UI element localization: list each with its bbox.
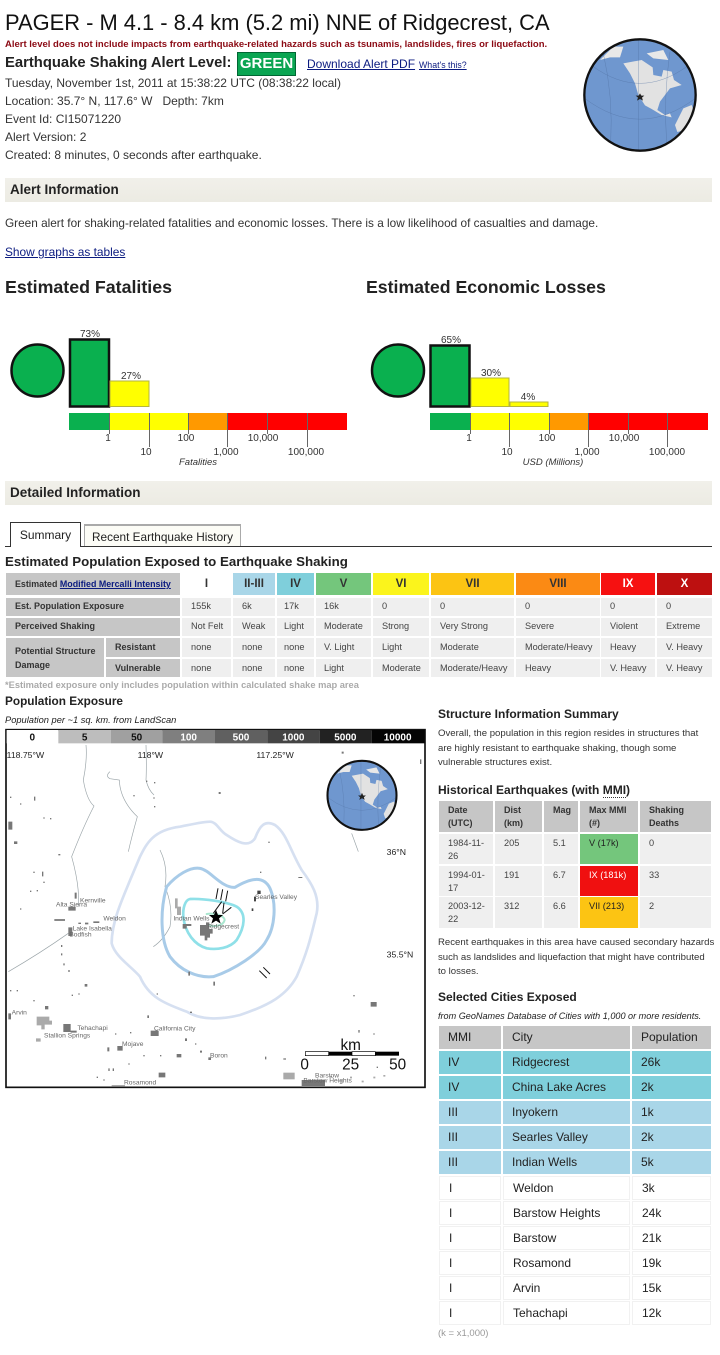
event details: Location: 35.7° N, 117.6° W Depth: 7km [5,94,224,108]
chart: fatalities [10,329,347,468]
table: shaking intensity: Moderate [440,642,479,652]
table: historical earthquakes: 17 [448,883,458,893]
table: shaking intensity [6,573,712,677]
table: shaking intensity: 0 [382,601,387,611]
map axis labels [7,750,413,960]
table: historical earthquakes: (km) [504,818,523,828]
table: shaking intensity: Not Felt [191,621,223,631]
table: selected cities: I [449,1306,452,1320]
table: shaking intensity: VII [465,578,480,590]
table: shaking intensity: IV [290,578,301,590]
table: shaking intensity: Heavy [610,642,636,652]
city labels: Weldon [103,916,126,923]
table: selected cities: MMI [448,1030,471,1044]
tab line [5,546,712,547]
legend: population scale: 500 [233,732,250,743]
shaking contours [112,822,317,1018]
chart: economic losses: 65% [441,335,461,346]
event details [5,76,341,162]
table: selected cities: City [512,1030,533,1044]
table: selected cities: Tehachapi [513,1306,568,1320]
chart: economic losses: 1,000 [574,447,600,458]
table: selected cities: Ridgecrest [512,1055,569,1069]
table: historical earthquakes: Deaths [649,818,679,828]
table: historical earthquakes: 26 [448,851,458,861]
scale bar: 50 [389,1056,406,1073]
secondary hazards text [438,937,714,977]
table: historical earthquakes: 205 [504,838,519,848]
table: historical earthquakes: Max MMI [589,805,627,815]
table: shaking intensity: Moderate/Heavy [525,642,592,652]
table: shaking intensity: Light [284,621,304,631]
legend: population scale: 5000 [334,732,357,743]
table: shaking intensity: 0 [666,601,671,611]
table: selected cities: Population [641,1030,698,1044]
map axis labels: 118.75°W [7,750,45,760]
table: shaking intensity: Extreme [666,621,700,631]
structure summary text: are highly resistant to earthquake shaking, though some [438,742,676,754]
table: shaking intensity: 0 [525,601,530,611]
population source note: Population per ~1 sq. km. from LandScan [5,715,176,725]
city labels: Rosamond [124,1080,156,1087]
epicenter star [209,910,223,924]
table: historical earthquakes: 33 [649,870,659,880]
table: selected cities: I [449,1206,452,1220]
secondary hazards text: Recent earthquakes in this area have caused secondary hazards [438,937,714,948]
table: selected cities: 21k [642,1231,661,1245]
cities source note: from GeoNames Database of Cities with 1,000 or more residents. [438,1011,701,1021]
table: selected cities: 24k [642,1206,661,1220]
tab: recent earthquake history: Recent Earthquake History [92,530,233,544]
green alert badge: GREEN [240,55,293,72]
structure summary text: vulnerable structures exist. [438,757,552,768]
table: shaking intensity: Perceived Shaking [15,621,95,631]
event details: Tuesday, November 1st, 2011 at 15:38:22 UTC (08:38:22 local) [5,76,341,90]
table: shaking intensity: IX [623,578,633,590]
table: shaking intensity: Est. Population Exposure [15,601,124,611]
table: historical earthquakes: Date [448,805,468,815]
alert summary: Green alert for shaking-related fatalities and economic losses. There is a low likelihood of casualties and damage. [5,216,598,230]
section bar: alert information [5,178,712,202]
table: historical earthquakes: (UTC) [448,818,472,828]
table: selected cities: 5k [641,1155,654,1169]
table: shaking intensity: none [242,663,262,673]
whats this link: What's this? [419,60,467,70]
table: shaking intensity: Light [382,642,402,652]
map: population exposure [5,728,426,1088]
table: selected cities: Rosamond [513,1256,571,1270]
chart: economic losses: 1 [466,433,472,444]
chart: fatalities: Fatalities [179,457,217,468]
table: selected cities: IV [448,1055,459,1069]
chart: fatalities: 27% [121,371,141,382]
alert level line: Earthquake Shaking Alert Level: [5,55,231,71]
legend: population scale: 1000 [282,732,305,743]
heading: detailed information: Detailed Information [10,485,141,500]
chart: fatalities: 10,000 [248,433,279,444]
scale bar: km [340,1037,361,1054]
legend: population scale [7,730,425,743]
table: shaking intensity: Violent [610,621,638,631]
tab: summary [10,522,81,547]
chart: economic losses: 30% [481,368,501,379]
city labels: Lake Isabella [73,926,112,933]
legend: population scale: 10000 [384,732,412,743]
city labels [12,894,352,1087]
table: selected cities: Weldon [513,1181,553,1195]
population clusters [8,752,421,1087]
table: historical earthquakes: 312 [504,901,519,911]
table: shaking intensity: Weak [242,621,265,631]
table: selected cities: Searles Valley [512,1130,588,1144]
table: shaking intensity: 0 [610,601,615,611]
map axis labels: 36°N [387,847,406,857]
table: shaking intensity: Potential Structure Damage [15,646,96,670]
chart: fatalities: 73% [80,329,100,340]
table: selected cities: 3k [642,1181,655,1195]
table: historical earthquakes: Shaking [649,805,684,815]
tab: summary: Summary [20,528,71,542]
table: selected cities: Barstow [513,1231,556,1245]
table: shaking intensity: none [284,663,304,673]
chart: fatalities: 1,000 [213,447,239,458]
city labels: Indian Wells [173,916,210,923]
heading: historical earthquakes: Historical Earthquakes (with MMI) [438,783,630,797]
city labels: California City [154,1026,196,1033]
table: shaking intensity: VI [396,578,406,590]
heading: estimated economic losses: Estimated Economic Losses [366,277,606,297]
secondary hazards text: to losses. [438,966,479,977]
event details: Created: 8 minutes, 0 seconds after earthquake. [5,148,262,162]
city labels: Mojave [122,1041,144,1048]
city labels: Stallion Springs [44,1032,91,1039]
table: shaking intensity: V. Heavy [666,663,702,673]
table: historical earthquakes: Mag [553,805,571,815]
table: selected cities: I [449,1231,452,1245]
city labels: Barstow Heights [303,1078,352,1085]
chart: economic losses: 10,000 [609,433,640,444]
table: historical earthquakes: IX (181k) [589,870,626,880]
table: selected cities: Barstow Heights [513,1206,600,1220]
chart: fatalities: 100 [178,433,195,444]
title: PAGER - M 4.1 - 8.4 km (5.2 mi) NNE of Ridgecrest, CA [5,10,550,35]
scale bar [300,1037,406,1073]
table: selected cities: III [448,1105,458,1119]
table: historical earthquakes [439,801,711,928]
table: selected cities: 15k [642,1281,661,1295]
table: historical earthquakes: 2003-12- [448,901,485,911]
exposure footnote: *Estimated exposure only includes population within calculated shake map area [5,680,359,690]
legend: population scale: 5 [82,732,88,743]
table: shaking intensity: V. Light [324,642,354,652]
table: shaking intensity: Severe [525,621,554,631]
city labels: Tehachapi [77,1025,108,1032]
rivers and roads [8,745,358,972]
table: shaking intensity: Vulnerable [115,663,161,673]
table: shaking intensity: Light [324,663,344,673]
table: historical earthquakes: VII (213) [589,901,624,911]
table: selected cities: Inyokern [512,1105,558,1119]
units note: (k = x1,000) [438,1328,488,1339]
heading: structure information summary: Structure Information Summary [438,707,619,721]
table: shaking intensity: Very Strong [440,621,488,631]
table: shaking intensity: V. Heavy [610,663,646,673]
table: historical earthquakes: 5.1 [553,838,566,848]
table: selected cities: 19k [642,1256,661,1270]
table: shaking intensity: 17k [284,601,299,611]
table: shaking intensity: none [242,642,262,652]
table: selected cities: I [449,1281,452,1295]
table: shaking intensity: X [681,578,688,590]
icon: inset globe [327,761,397,830]
table: historical earthquakes: 22 [448,914,458,924]
table: selected cities [439,1026,711,1325]
table: shaking intensity: Heavy [525,663,551,673]
chart: economic losses: USD (Millions) [523,457,583,468]
section bar: detailed information [5,481,712,505]
city labels: Searles Valley [255,894,298,901]
structure summary text [438,728,698,768]
table: shaking intensity: Strong [382,621,409,631]
table: selected cities: Indian Wells [512,1155,577,1169]
structure summary text: Overall, the population in this region resides in structures that [438,728,698,739]
chart: fatalities: 1 [105,433,111,444]
table: shaking intensity: 155k [191,601,211,611]
table: historical earthquakes: (#) [589,818,600,828]
table: historical earthquakes: 1984-11- [448,838,484,848]
table: shaking intensity: 0 [440,601,445,611]
table: selected cities: 1k [641,1105,654,1119]
event details: Event Id: CI15071220 [5,112,121,126]
table: selected cities: IV [448,1080,459,1094]
heading: population exposed: Estimated Population Exposed to Earthquake Shaking [5,554,348,569]
secondary hazards text: such as landslides and liquefaction that might have contributed [438,952,705,962]
legend: population scale: 100 [180,732,197,743]
table: shaking intensity: none [191,642,211,652]
table: selected cities: I [449,1181,452,1195]
table: historical earthquakes: V (17k) [589,838,619,848]
table: shaking intensity: Moderate [382,663,421,673]
chart: fatalities: 100,000 [288,447,325,458]
scale bar: 25 [342,1056,359,1073]
table: historical earthquakes: 0 [649,838,654,848]
green alert badge [237,52,296,76]
map intensity labels [54,888,270,978]
legend: population scale: 50 [131,732,143,743]
table: shaking intensity: V. Heavy [666,642,702,652]
map axis labels: 118°W [138,750,164,760]
table: historical earthquakes: Dist [504,805,521,815]
table: shaking intensity: Estimated Modified Mercalli Intensity [15,579,171,589]
table: shaking intensity: VIII [549,578,567,590]
heading: population exposure: Population Exposure [5,694,123,708]
city labels: Arvin [12,1009,27,1016]
table: shaking intensity: I [205,578,208,590]
chart: economic losses: 10 [501,447,513,458]
table: shaking intensity: Resistant [115,642,156,652]
chart: fatalities: 10 [140,447,152,458]
heading: selected cities exposed: Selected Cities Exposed [438,990,577,1004]
map axis labels: 35.5°N [387,950,413,960]
table: historical earthquakes: 2 [649,901,654,911]
city labels: Alta Sierra [56,902,87,909]
table: shaking intensity: Moderate/Heavy [440,663,507,673]
city labels: Boron [210,1053,228,1060]
city labels: Ridgecrest [207,924,239,931]
table: shaking intensity: Moderate [324,621,363,631]
city labels: Kernville [80,898,106,905]
table: historical earthquakes: 191 [504,870,519,880]
chart: economic losses: 100 [539,433,556,444]
table: selected cities: 26k [641,1055,660,1069]
table: shaking intensity: none [191,663,211,673]
table: shaking intensity: none [284,642,304,652]
map axis labels: 117.25°W [256,750,295,760]
city labels: Bodfish [69,932,92,939]
table: selected cities: III [448,1130,458,1144]
chart: economic losses: 100,000 [649,447,686,458]
chart: economic losses: 4% [521,392,535,403]
table: historical earthquakes: 6.7 [553,870,566,880]
city labels: Barstow [315,1072,339,1079]
graphs as tables link: Show graphs as tables [5,245,125,259]
table: historical earthquakes: 1994-01- [448,870,485,880]
table: selected cities: 2k [641,1130,654,1144]
alert disclaimer: Alert level does not include impacts from earthquake-related hazards such as tsunamis, landslides, fires or liquefaction. [5,39,547,50]
table: selected cities: III [448,1155,458,1169]
table: selected cities: Arvin [513,1281,540,1295]
table: shaking intensity: 16k [324,601,339,611]
table: shaking intensity: V [340,578,347,590]
scale bar: 0 [300,1056,309,1073]
table: shaking intensity: 6k [242,601,252,611]
download link: Download Alert PDF [307,57,415,71]
table: selected cities: China Lake Acres [512,1080,606,1094]
event details: Alert Version: 2 [5,130,86,144]
heading: estimated fatalities: Estimated Fatalities [5,277,172,297]
table: selected cities: I [449,1256,452,1270]
icon: location globe [583,38,697,152]
tab: recent earthquake history [84,524,241,546]
heading: alert information: Alert Information [10,182,119,197]
table: selected cities: 12k [642,1306,661,1320]
table: selected cities: 2k [641,1080,654,1094]
chart: economic losses [370,335,708,468]
table: shaking intensity: II-III [244,578,264,590]
legend: population scale: 0 [30,732,36,743]
table: historical earthquakes: 6.6 [553,901,566,911]
